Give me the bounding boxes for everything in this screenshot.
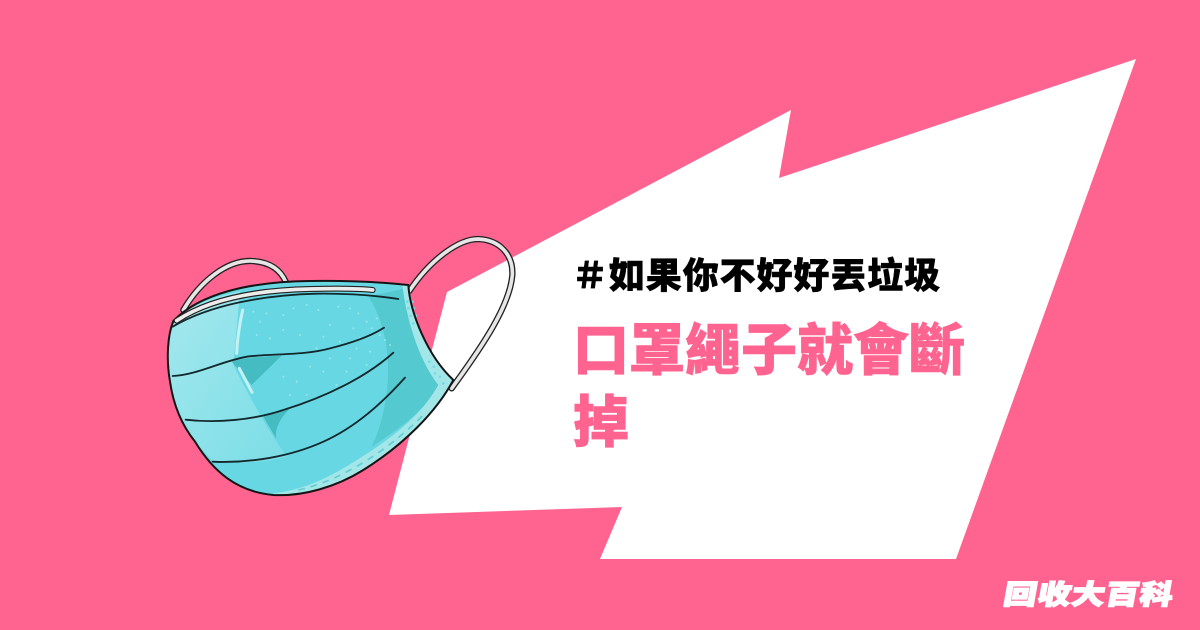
main title: 口罩繩子就會斷掉: [573, 319, 965, 454]
right ear loop: [409, 239, 512, 388]
stitching: [298, 415, 423, 490]
heading: hashtag line: ＃如果你不好好丟垃圾: [572, 255, 941, 296]
right darker shade: [368, 288, 440, 447]
left ear loop: [183, 261, 286, 310]
speckle texture: [252, 304, 391, 396]
nose wire: [177, 289, 373, 321]
fold shadows: [232, 356, 282, 385]
edge dots: [406, 300, 445, 385]
mask body: [168, 281, 453, 495]
right edge light band: [267, 285, 453, 495]
left light highlight: [168, 292, 287, 462]
reflection strokes: [237, 310, 243, 353]
mask outline: [168, 281, 453, 495]
logo: 回收大百科: 回收大百科: [1001, 579, 1177, 610]
pleat lines: [173, 294, 405, 462]
